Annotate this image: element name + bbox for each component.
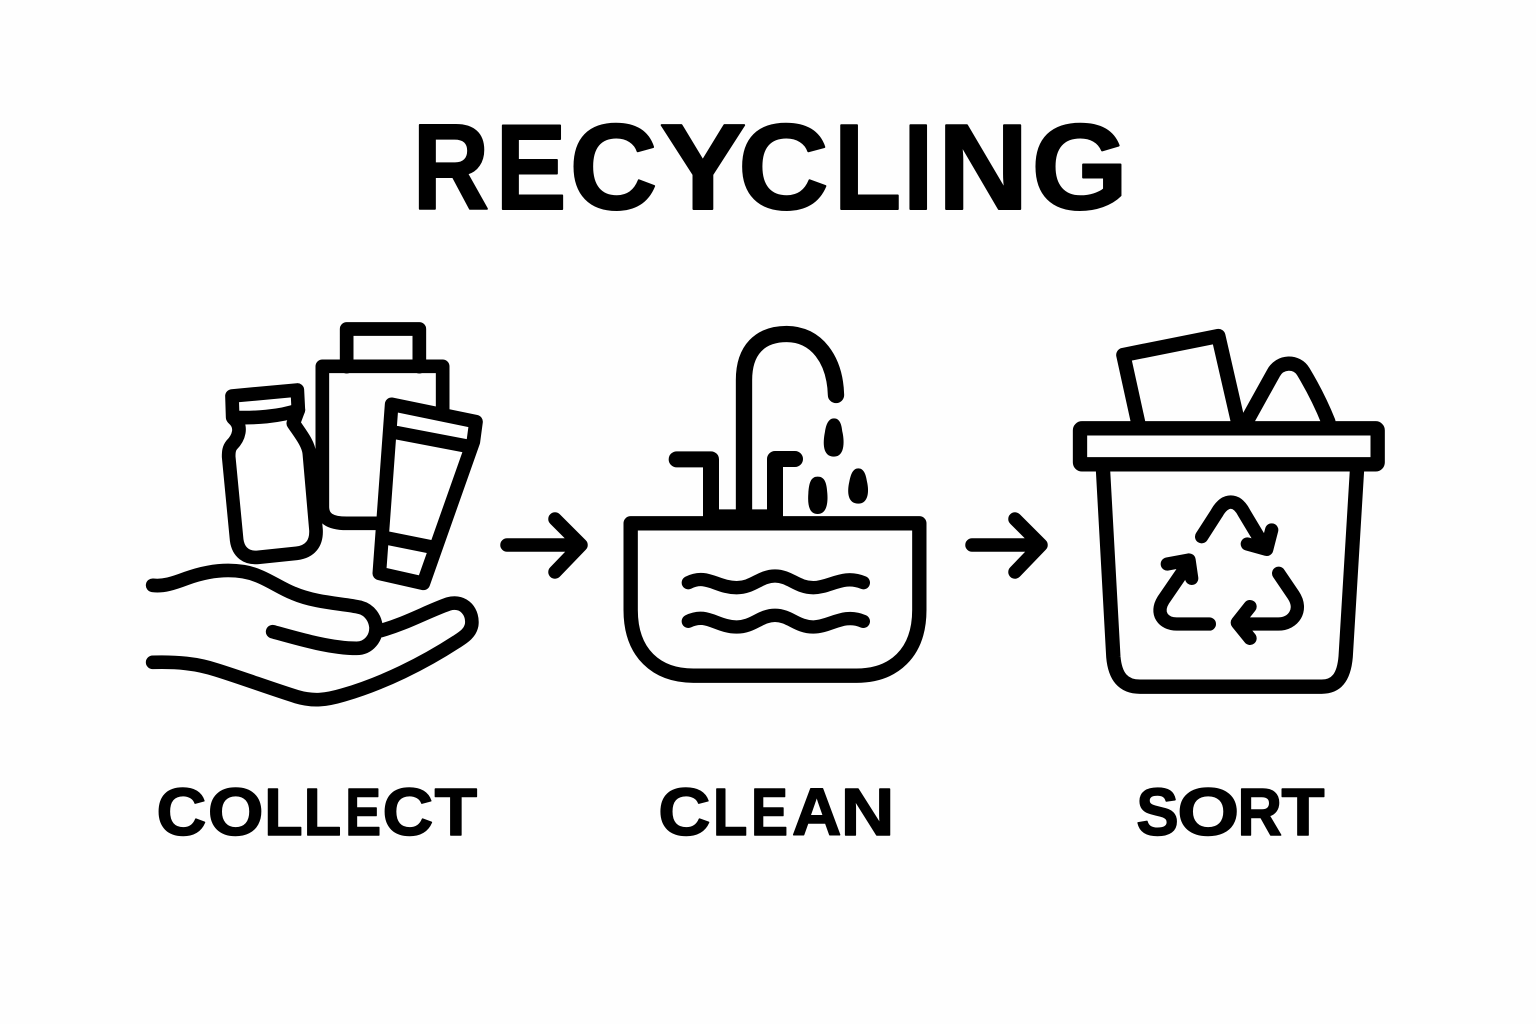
- icon: hand holding containers: [153, 329, 476, 700]
- label: sort: R: [1238, 775, 1282, 850]
- title: Y: [660, 99, 746, 235]
- title: C: [570, 99, 658, 235]
- water drops: [808, 418, 868, 514]
- label: collect: T: [435, 775, 477, 850]
- icon: recycling bin: [1080, 336, 1378, 687]
- arrow: collect to clean: [507, 519, 581, 572]
- hand: [153, 570, 472, 700]
- faucet: [744, 334, 836, 517]
- squeeze tube: [379, 404, 476, 583]
- label: collect: C: [156, 775, 206, 850]
- label: sort: S: [1136, 775, 1179, 850]
- title: I: [903, 99, 934, 235]
- label: sort: O: [1177, 775, 1239, 850]
- label: sort: T: [1282, 775, 1325, 850]
- arrow: clean to sort: [972, 519, 1041, 572]
- label: clean: L: [713, 775, 747, 850]
- small jar: [229, 390, 316, 557]
- title: L: [834, 99, 901, 235]
- water waves: [688, 576, 863, 627]
- bin body: [1103, 470, 1357, 687]
- faucet handles: [677, 459, 795, 517]
- label: collect: O: [208, 775, 264, 850]
- title: G: [1031, 99, 1128, 235]
- label: collect: E: [345, 775, 381, 850]
- label: collect: L: [304, 775, 341, 850]
- title: R: [413, 99, 489, 235]
- title: C: [738, 99, 829, 235]
- title: E: [496, 99, 566, 235]
- title: N: [938, 99, 1029, 235]
- label: clean: C: [658, 775, 711, 850]
- large bottle: [322, 329, 443, 523]
- label: collect: C: [382, 775, 433, 850]
- label: collect: L: [264, 775, 303, 850]
- recycling symbol: [1160, 502, 1297, 638]
- bottle in bin: [1248, 364, 1328, 422]
- label: clean: N: [841, 775, 894, 850]
- bin lid: [1080, 428, 1378, 464]
- label: clean: A: [792, 775, 841, 850]
- basin: [631, 523, 919, 676]
- paper in bin: [1123, 336, 1238, 423]
- label: clean: E: [751, 775, 788, 850]
- icon: sink with running faucet: [631, 334, 919, 676]
